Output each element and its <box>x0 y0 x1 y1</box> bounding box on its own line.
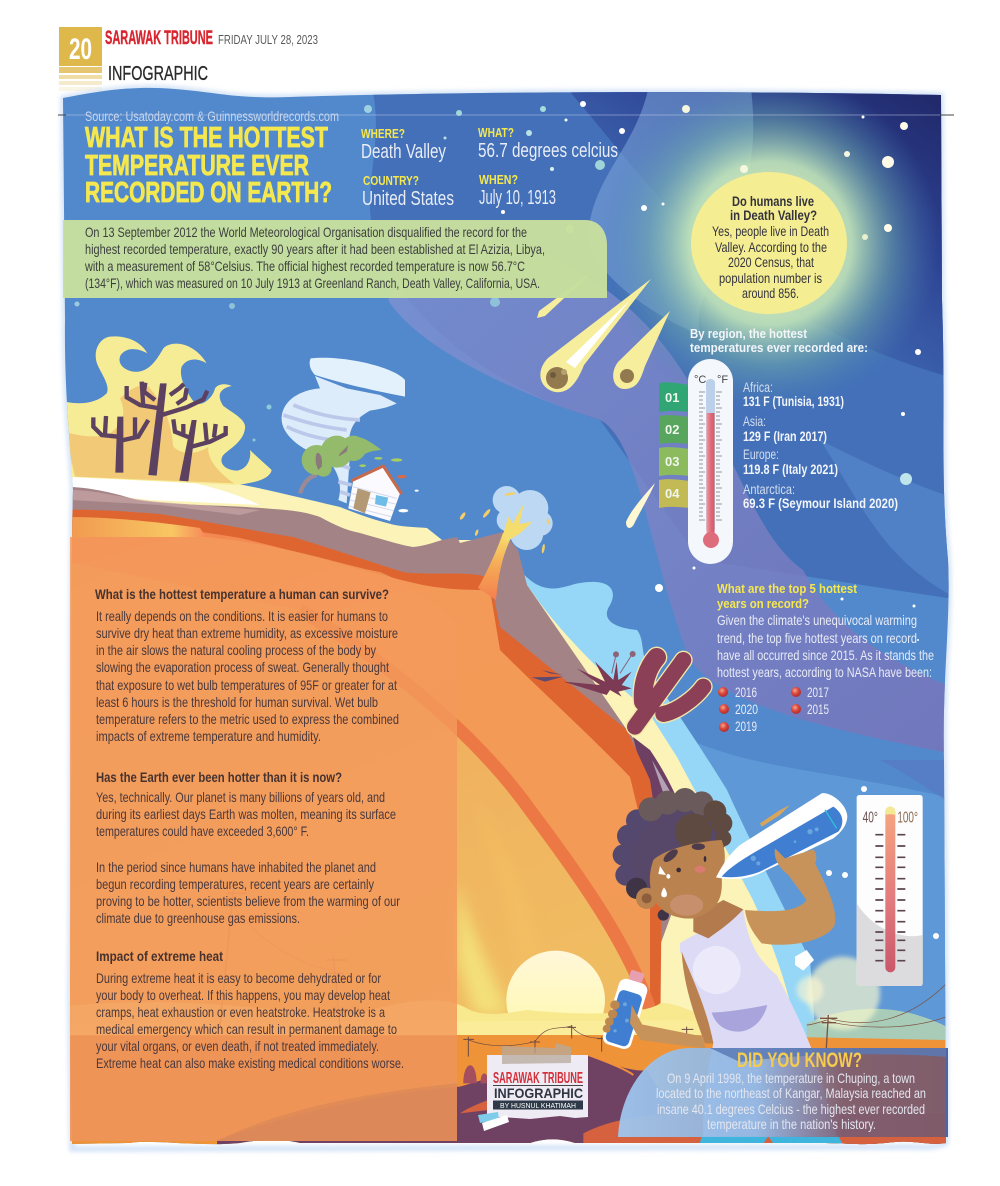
fact: country: COUNTRY? <box>363 173 419 188</box>
Africa: 131 F (Tunisia, 1931) <box>743 393 844 409</box>
lower arm <box>682 952 713 1043</box>
decorative stars <box>74 101 939 939</box>
horizon haze and ground <box>60 950 947 1150</box>
page number badge: 20 <box>69 33 92 66</box>
tornado and house <box>282 358 419 521</box>
year list <box>718 684 829 734</box>
top five hottest years block <box>717 581 934 734</box>
tab 02: 02 <box>665 422 679 437</box>
article: impact of extreme heat: Impact of extreme heat <box>96 948 223 964</box>
article: hottest temperature a human can survive: in the air slows the natural cooling process of the body by <box>96 642 376 658</box>
neck <box>693 900 743 938</box>
article: hottest temperature a human can survive: It really depends on the conditions. It is easier for humans to <box>96 608 388 624</box>
article: has the Earth ever been hotter: climate due to greenhouse gas emissions. <box>96 910 300 926</box>
logo card: INFOGRAPHIC <box>494 1085 583 1101</box>
year list: 2020 <box>735 701 758 717</box>
article: has the Earth ever been hotter: begun recording temperatures, recent years are certainly <box>96 876 374 892</box>
callout: do humans live in Death Valley: 2020 Census, that <box>728 254 814 270</box>
year list: 2017 <box>807 684 829 700</box>
raised arm <box>745 860 835 945</box>
heading <box>717 581 858 611</box>
Europe: Europe: <box>743 446 779 462</box>
fact: what: 56.7 degrees celcius <box>478 140 618 162</box>
shorts <box>700 1130 842 1144</box>
light blue wave behind land <box>524 574 814 1037</box>
paragraph: have all occurred since 2015. As it stands the <box>717 647 934 663</box>
small wall thermometer: 40° <box>863 810 878 827</box>
callout: do humans live in Death Valley: around 856. <box>742 285 799 301</box>
main title: TEMPERATURE EVER <box>85 150 309 182</box>
did you know box: DID YOU KNOW? <box>737 1049 862 1072</box>
Europe: 119.8 F (Italy 2021) <box>743 461 838 477</box>
holding hand <box>603 1000 643 1037</box>
boy drinking water <box>601 788 847 1149</box>
water bottle <box>716 793 847 879</box>
orange text panel <box>70 537 457 1141</box>
paragraph: Given the climate's unequivocal warming <box>717 612 917 628</box>
Antarctica: Antarctica: <box>743 481 795 497</box>
raised hand <box>775 848 816 875</box>
article: hottest temperature a human can survive: least 6 hours is the threshold for human survival. Wet bulb <box>96 694 378 710</box>
article: has the Earth ever been hotter: proving to be hotter, scientists believe from the warming of our <box>96 893 400 909</box>
green intro panel: On 13 September 2012 the World Meteorological Organisation disqualified the record for the <box>85 224 527 240</box>
paragraph <box>717 612 934 680</box>
paragraph: hottest years, according to NASA have been: <box>717 664 932 680</box>
green intro panel <box>63 220 607 298</box>
small wall thermometer <box>857 795 923 986</box>
fact: what <box>478 125 618 162</box>
source line: Source: Usatoday.com & Guinnessworldrecords.com <box>85 108 339 124</box>
sleeveless shirt <box>680 909 837 1137</box>
fire and burnt trees <box>65 336 272 485</box>
numbered tabs <box>659 382 690 508</box>
logo card: BY HUSNUL KHATIMAH <box>500 1101 576 1110</box>
article: has the Earth ever been hotter: In the period since humans have inhabited the planet and <box>96 859 376 875</box>
article: impact of extreme heat <box>96 948 404 1071</box>
Antarctica <box>743 481 898 511</box>
fact: when: WHEN? <box>479 172 518 187</box>
article: has the Earth ever been hotter: temperatures could have exceeded 3,600° F. <box>96 823 309 839</box>
heading: by region: By region, the hottest <box>690 326 808 341</box>
Asia <box>743 413 827 444</box>
fact: country <box>362 173 454 210</box>
paragraph: trend, the top five hottest years on record <box>717 630 917 646</box>
heading: by region: temperatures ever recorded are: <box>690 340 868 355</box>
tab 04: 04 <box>665 486 680 501</box>
did you know box: On 9 April 1998, the temperature in Chuping, a town <box>667 1070 915 1086</box>
Asia: 129 F (Iran 2017) <box>743 428 827 444</box>
article: hottest temperature a human can survive <box>95 586 399 744</box>
callout: do humans live in Death Valley: Yes, people live in Death <box>712 223 829 239</box>
large thermometer: °F <box>717 374 728 386</box>
article: hottest temperature a human can survive: What is the hottest temperature a human can survive? <box>95 586 389 602</box>
callout: do humans live in Death Valley: in Death Valley? <box>730 207 817 223</box>
main title <box>85 122 332 209</box>
article: hottest temperature a human can survive: temperature refers to the metric used to express the combined <box>96 711 399 727</box>
did you know box: located to the northeast of Kangar, Malaysia reached an <box>656 1085 926 1101</box>
green intro panel: with a measurement of 58°Celsius. The official highest recorded temperature is now 56.7°C <box>84 258 525 274</box>
green intro panel: (134°F), which was measured on 10 July 1913 at Greenland Ranch, Death Valley, California, USA. <box>85 275 540 291</box>
tab 01: 01 <box>665 390 679 405</box>
fact: where: WHERE? <box>361 126 405 141</box>
article: impact of extreme heat: cramps, heat exhaustion or even heatstroke. Heatstroke is a <box>96 1004 385 1020</box>
large thermometer <box>688 359 733 564</box>
volcano eruption <box>459 486 553 553</box>
did you know box <box>618 1048 948 1137</box>
heading: years on record? <box>717 596 809 611</box>
fact: when: July 10, 1913 <box>479 187 556 209</box>
sun <box>506 950 605 1014</box>
fact: country: United States <box>362 188 454 210</box>
fact: what: WHAT? <box>478 125 514 140</box>
year list: 2016 <box>735 684 757 700</box>
article: hottest temperature a human can survive: that exposure to wet bulb temperatures of 95F or greater for at <box>96 677 397 693</box>
article: hottest temperature a human can survive: impacts of extreme temperature and humidity. <box>96 728 321 744</box>
logo card: SARAWAK TRIBUNE <box>493 1070 583 1087</box>
Asia: Asia: <box>743 413 766 429</box>
heading: What are the top 5 hottest <box>717 581 858 596</box>
article: impact of extreme heat: Extreme heat can also make existing medical conditions worse. <box>96 1055 404 1071</box>
article: has the Earth ever been hotter: Has the Earth ever been hotter than it is now? <box>96 769 342 785</box>
land layers: sand, rock and molten earth <box>60 336 800 1060</box>
masthead: newspaper name and date: FRIDAY JULY 28, 2023 <box>218 32 318 47</box>
article: impact of extreme heat: your body to overheat. If this happens, you may develop heat <box>96 987 390 1003</box>
did you know box: insane 40.1 degrees Celcius - the highest ever recorded <box>657 1101 925 1117</box>
callout: do humans live in Death Valley: Valley. According to the <box>715 239 827 255</box>
heading: by region <box>690 326 868 355</box>
article: impact of extreme heat: During extreme heat it is easy to become dehydrated or for <box>96 970 381 986</box>
logo card <box>478 1043 588 1131</box>
callout: do humans live in Death Valley <box>691 172 847 314</box>
article: has the Earth ever been hotter <box>96 769 400 926</box>
article: has the Earth ever been hotter: Yes, technically. Our planet is many billions of years old, and <box>96 789 385 805</box>
callout: do humans live in Death Valley: population number is <box>719 270 822 286</box>
telegraph poles and wires <box>463 983 947 1057</box>
lava stream <box>478 533 510 600</box>
article: has the Earth ever been hotter: during its earliest days Earth was molten, meaning its surface <box>96 806 396 822</box>
callout: do humans live in Death Valley: Do humans live <box>732 193 814 209</box>
cactus and desert plant <box>532 651 703 727</box>
meteors <box>537 272 670 528</box>
hair <box>613 788 732 921</box>
regional records list <box>743 379 898 511</box>
section heading: Infographic: INFOGRAPHIC <box>108 63 208 85</box>
panel soft edge <box>63 88 949 1149</box>
did you know box: temperature in the nation's history. <box>707 1116 876 1132</box>
faint scene behind text <box>220 890 347 1027</box>
fact: where: Death Valley <box>361 141 446 163</box>
main title: RECORDED ON EARTH? <box>85 177 332 209</box>
small bottle in hand <box>602 970 648 1049</box>
page number badge <box>59 27 102 91</box>
Africa: Africa: <box>743 379 773 395</box>
year list: 2015 <box>807 701 829 717</box>
large thermometer: °C <box>694 374 706 386</box>
article: hottest temperature a human can survive: slowing the evaporation process of sweat. Generally thought <box>96 659 389 675</box>
Europe <box>743 446 838 477</box>
masthead: newspaper name and date: SARAWAK TRIBUNE <box>105 28 213 49</box>
small wall thermometer: 100° <box>897 810 918 827</box>
article: impact of extreme heat: your vital organs, or even death, if not treated immediately. <box>96 1038 379 1054</box>
Africa <box>743 379 844 409</box>
article: hottest temperature a human can survive: survive dry heat than extreme humidity, as excessive moisture <box>96 625 398 641</box>
fact: where <box>361 126 446 163</box>
tab 03: 03 <box>665 454 679 469</box>
fact: when <box>479 172 556 209</box>
Antarctica: 69.3 F (Seymour Island 2020) <box>743 495 898 511</box>
year list: 2019 <box>735 718 757 734</box>
main title: WHAT IS THE HOTTEST <box>85 122 328 154</box>
article: impact of extreme heat: medical emergency which can result in permanent damage to <box>96 1021 397 1037</box>
green intro panel: highest recorded temperature, exactly 90 years after it had been established at El Azizia, Libya, <box>85 241 545 257</box>
desert sunset scene <box>60 788 947 1150</box>
faint registration line <box>58 114 954 116</box>
head <box>650 840 725 919</box>
